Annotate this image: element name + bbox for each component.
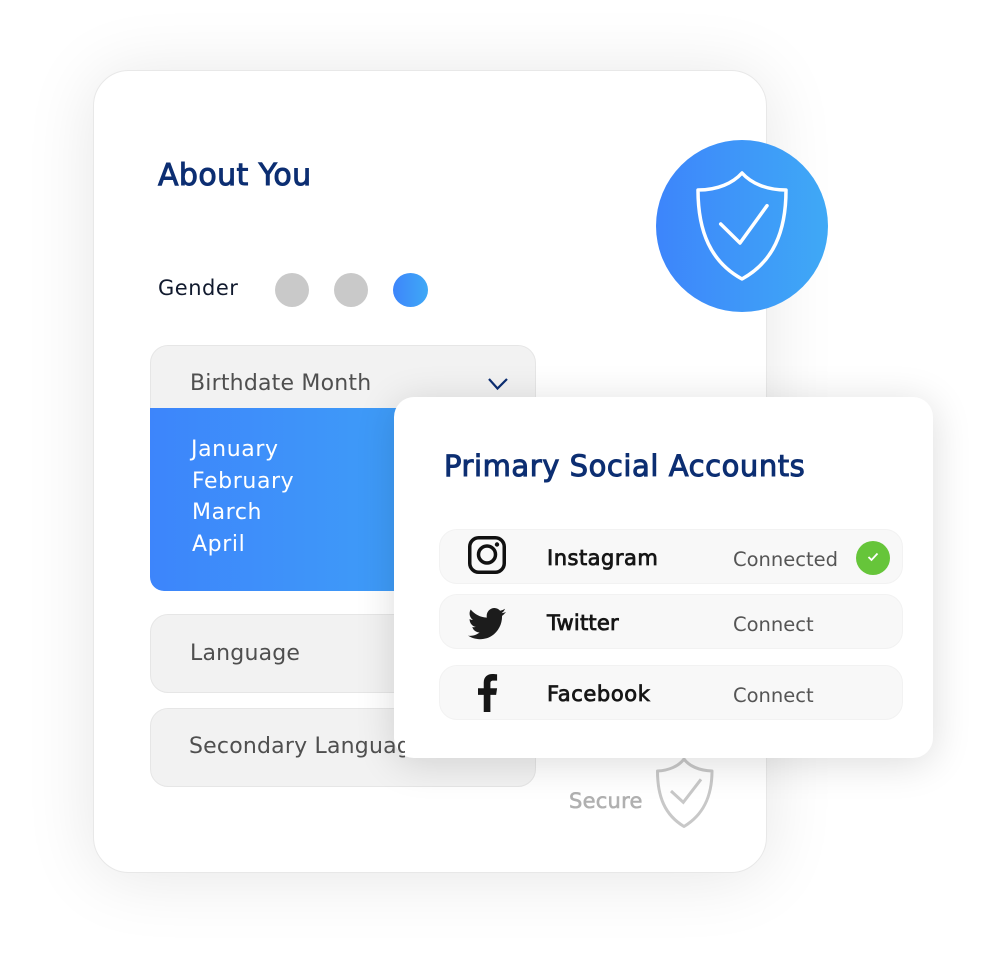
dropdown: birthdate month: January <box>191 437 279 462</box>
row: instagram <box>439 529 903 584</box>
row: facebook: Connect <box>733 684 814 707</box>
label: Gender: Gender <box>158 276 238 300</box>
heading: Primary Social Accounts: Primary Social Accounts <box>444 449 805 483</box>
row: facebook: Facebook <box>547 682 650 706</box>
panel: about you card <box>93 70 767 873</box>
dropdown: birthdate month <box>150 345 536 591</box>
dropdown: birthdate month: Birthdate Month <box>190 371 371 396</box>
field: language: Language <box>190 641 300 666</box>
gender option dots <box>275 273 428 307</box>
dropdown: birthdate month: March <box>192 500 262 525</box>
row: twitter: Connect <box>733 613 814 636</box>
row: twitter <box>439 594 903 649</box>
dropdown: birthdate month: April <box>192 532 245 557</box>
row: facebook <box>439 665 903 720</box>
dropdown: birthdate month: February <box>192 469 294 494</box>
panel: primary social accounts <box>394 397 933 758</box>
row: instagram: Connected <box>733 548 838 571</box>
secure label: Secure <box>569 789 643 813</box>
row: twitter: Twitter <box>547 611 619 635</box>
row: instagram: Instagram <box>547 546 658 570</box>
field: secondary language <box>150 708 536 787</box>
heading: About You: About You <box>158 158 312 193</box>
icon: blue shield badge <box>656 140 828 312</box>
icon: secure shield <box>656 758 714 828</box>
field: language <box>150 614 536 693</box>
